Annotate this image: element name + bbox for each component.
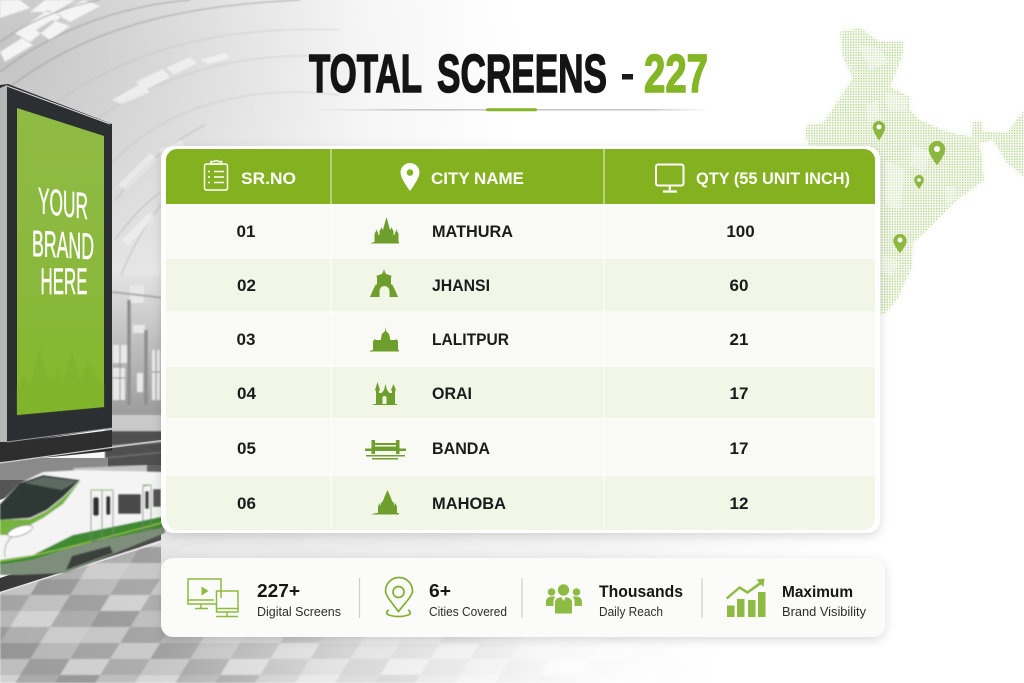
icon: orai mosque — [372, 382, 397, 405]
stat: brand visibility — [726, 578, 867, 619]
title: TOTAL — [309, 44, 422, 104]
title: 227 — [644, 44, 708, 104]
screen text: HERE — [40, 261, 88, 302]
row 06 — [237, 490, 748, 514]
icon: lalitpur palace — [369, 327, 399, 352]
table header: QTY (55 UNIT INCH) — [696, 169, 850, 188]
map pins — [873, 121, 945, 253]
screen text — [32, 179, 94, 302]
stat: digital screens: 227+ — [257, 581, 300, 601]
table header: SR.NO — [241, 169, 296, 188]
stat: cities covered: 6+ — [429, 581, 451, 601]
stat: cities covered — [386, 578, 507, 619]
row 01: MATHURA — [432, 222, 513, 241]
billboard: BRAND — [32, 222, 94, 267]
screen — [17, 108, 104, 415]
floor — [0, 470, 800, 683]
title — [309, 44, 708, 104]
row 04: ORAI — [432, 384, 472, 403]
row 06: 12 — [730, 494, 748, 513]
row 01 — [237, 217, 755, 244]
stats bar — [161, 558, 885, 637]
row 05 — [237, 439, 748, 460]
screen text: YOUR — [38, 179, 88, 227]
row 05: BANDA — [432, 439, 490, 458]
row 03: 21 — [730, 330, 748, 349]
row 02: 02 — [237, 276, 256, 295]
title underline — [308, 108, 710, 111]
row 04: 17 — [730, 384, 748, 403]
row 02: 60 — [730, 276, 748, 295]
train — [0, 465, 165, 576]
stat: daily reach: Daily Reach — [599, 605, 663, 619]
row 05: 05 — [237, 439, 256, 458]
stat: daily reach — [546, 582, 683, 619]
row 02 — [237, 269, 748, 297]
title: SCREENS — [437, 44, 607, 104]
roof structure — [0, 0, 360, 290]
row 04 — [237, 382, 748, 405]
icon: monitor — [656, 164, 684, 192]
icon: mahoba temple — [371, 490, 399, 514]
row 03: LALITPUR — [432, 330, 509, 349]
row 03 — [237, 327, 748, 352]
table rows — [166, 204, 875, 530]
stat: digital screens — [188, 579, 341, 619]
stat: digital screens: Digital Screens — [257, 605, 341, 619]
icon: jhansi gate — [370, 269, 398, 297]
row 04: 04 — [237, 384, 256, 403]
table panel — [161, 146, 880, 533]
row 06: MAHOBA — [432, 494, 506, 513]
icon: mathura temple — [370, 217, 399, 244]
icon: clipboard — [204, 160, 228, 190]
row 01: 01 — [237, 222, 255, 241]
row 01: 100 — [726, 222, 755, 241]
india dotted map — [805, 28, 1024, 315]
row 05: 17 — [730, 439, 748, 458]
table header — [166, 149, 875, 204]
icon: banda bridge — [365, 440, 406, 460]
stat: daily reach: Thousands — [599, 582, 683, 601]
row 03: 03 — [237, 330, 255, 349]
billboard — [0, 84, 165, 500]
stat: brand visibility: Maximum — [782, 584, 853, 601]
stat: cities covered: Cities Covered — [429, 605, 507, 619]
row 06: 06 — [237, 494, 256, 513]
table header: CITY NAME — [431, 169, 524, 188]
icon: location pin — [400, 163, 420, 191]
stat: brand visibility: Brand Visibility — [782, 605, 867, 619]
pedestal — [0, 430, 112, 462]
row 02: JHANSI — [432, 276, 490, 295]
station hall — [105, 275, 165, 474]
